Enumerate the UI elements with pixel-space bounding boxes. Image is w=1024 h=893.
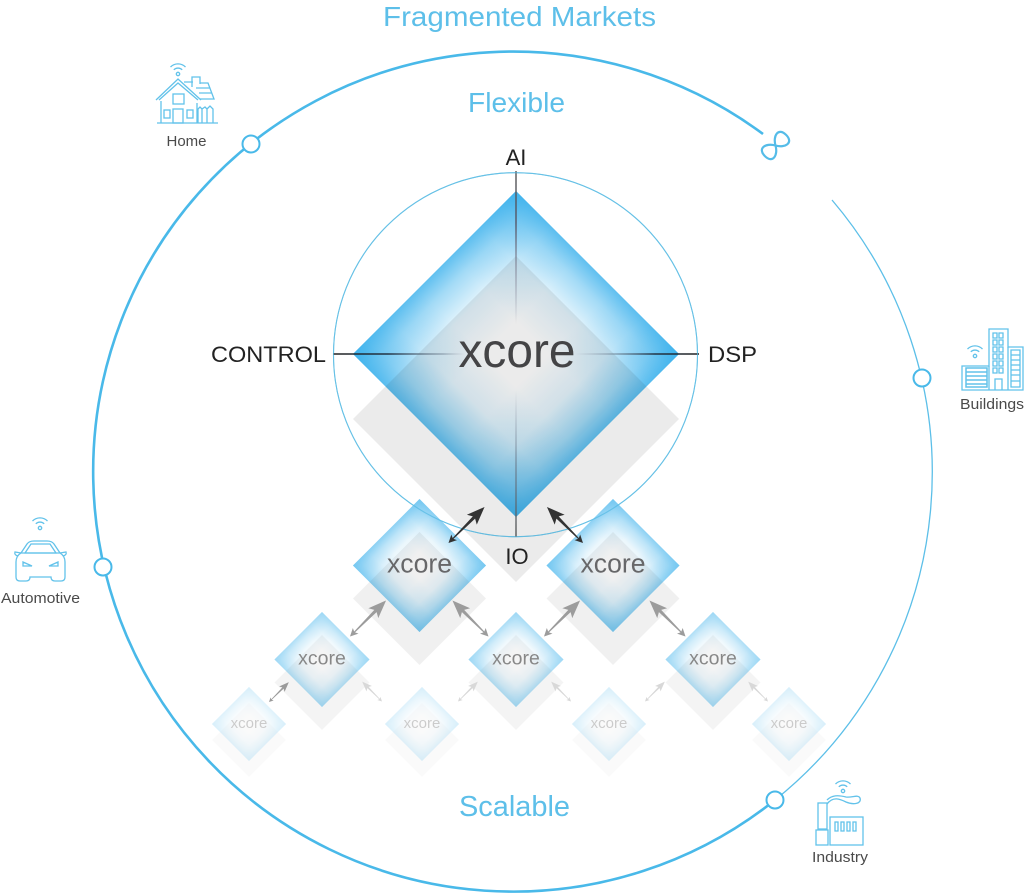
heading: Flexible: Flexible: [468, 87, 565, 118]
ring node: home: [242, 136, 260, 152]
label: Buildings: Buildings: [960, 396, 1024, 413]
inner circle overlap on tier 2: [334, 173, 698, 537]
diamond 2a: xcore: [387, 548, 452, 578]
diamond 4a: [212, 687, 286, 777]
heading: Scalable: Scalable: [459, 791, 570, 823]
axis label: IO: IO: [505, 544, 529, 569]
label: Automotive: Automotive: [1, 590, 80, 607]
diamond 3b: xcore: [492, 648, 540, 670]
arrows: tier 3: [266, 679, 771, 705]
diamond 3b: [468, 612, 564, 730]
icon: home: [156, 64, 218, 123]
inner circle: [334, 173, 698, 537]
diamond 3a: xcore: [298, 648, 346, 670]
diamond 4c: xcore: [591, 715, 627, 732]
axis lines: [333, 171, 699, 537]
ring node: industry: [766, 792, 784, 808]
label: Industry: Industry: [812, 849, 869, 866]
axis label: CONTROL: CONTROL: [211, 342, 326, 367]
diamond 4d: xcore: [771, 715, 807, 732]
arrows: tier 2: [345, 595, 690, 641]
diamond 4b: xcore: [404, 715, 440, 732]
diamond 3a: [274, 612, 370, 730]
outer ring: thin arc: [775, 200, 932, 800]
axis label: DSP: DSP: [708, 342, 757, 367]
tier 2 diamonds: [353, 499, 680, 665]
icon: buildings: [962, 329, 1023, 390]
ring node: automotive: [94, 558, 112, 576]
title: Fragmented Markets: Fragmented Markets: [383, 1, 656, 32]
diamond 4d: [752, 687, 826, 777]
icon: infinity: [760, 130, 791, 161]
diamond 4b: [385, 687, 459, 777]
diamond 2b: xcore: [580, 548, 646, 578]
diamond 3c: [666, 612, 760, 730]
icon: industry: [816, 781, 863, 845]
tier 3 diamonds: [274, 612, 760, 730]
axis label: AI: AI: [506, 145, 526, 170]
ring node: buildings: [914, 370, 930, 386]
diamond 2b: [546, 499, 680, 665]
diamond 3c: xcore: [689, 648, 737, 670]
outer ring: thick arc: [93, 52, 775, 892]
tier 4 small diamonds: [212, 687, 826, 777]
label: Home: Home: [166, 133, 207, 150]
arrows: tier 1: [444, 502, 588, 548]
main xcore label: xcore: [458, 325, 576, 378]
icon: automotive: [15, 518, 66, 581]
diamond 4c: [572, 687, 646, 777]
diamond 4a: xcore: [231, 715, 267, 732]
diamond 2a: [353, 499, 486, 665]
main xcore diamond: [353, 191, 679, 582]
